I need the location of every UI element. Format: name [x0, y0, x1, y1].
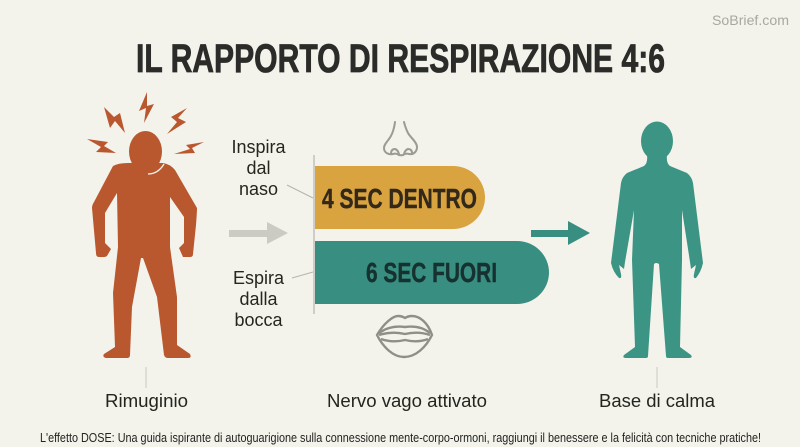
pointer: inhale	[287, 185, 313, 198]
label: rimuginio: Rimuginio	[105, 391, 188, 411]
connector	[145, 367, 147, 388]
bar: inhale	[315, 166, 485, 229]
arrow: teal	[531, 221, 590, 245]
connector	[656, 367, 658, 388]
axis line	[313, 155, 315, 314]
label: exhale: dalla	[239, 289, 279, 309]
bar: exhale	[315, 241, 549, 304]
panel: breathing bars	[231, 122, 549, 411]
icon: stressed figure	[92, 131, 197, 358]
icon: nose	[384, 122, 417, 155]
icon: lips	[377, 316, 432, 357]
label: inhale: dal	[246, 158, 271, 178]
label: calm baseline: Base di calma	[599, 391, 716, 411]
bar label: inhale: 4 SEC DENTRO	[322, 183, 477, 214]
bar label: exhale: 6 SEC FUORI	[366, 257, 497, 288]
icon: calm figure	[611, 122, 703, 358]
panel: rumination figure	[87, 92, 204, 411]
label: exhale: bocca	[234, 310, 283, 330]
label: inhale: Inspira	[231, 137, 286, 157]
watermark: SoBrief.com	[712, 13, 789, 28]
pointer: exhale	[292, 272, 313, 278]
label: inhale: naso	[239, 179, 278, 199]
label: exhale: Espira	[233, 268, 285, 288]
panel: calm figure	[599, 122, 716, 411]
arrow: grey	[229, 222, 288, 244]
icon: lightning bolts	[87, 92, 204, 154]
label: vagus nerve: Nervo vago attivato	[327, 391, 487, 411]
